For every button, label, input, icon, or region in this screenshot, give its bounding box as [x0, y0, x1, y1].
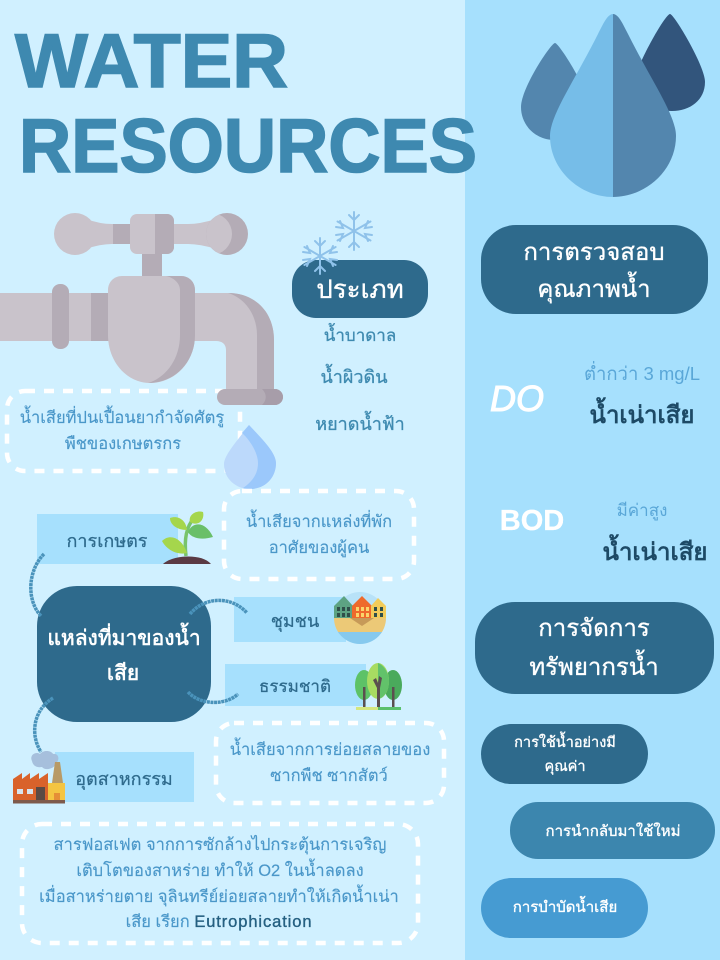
panel: water management heading: ทรัพยากรน้ำ: [529, 649, 659, 681]
water types list: น้ำผิวดิน: [320, 364, 388, 387]
icon: plant: [162, 512, 213, 564]
title: RESOURCES: [19, 104, 477, 189]
label: industry: อุตสาหกรรม: [75, 769, 173, 790]
panel: types pill: [292, 260, 428, 318]
icon: water drops: [521, 14, 705, 197]
panel: wastewater sources hub: แหล่งที่มาของน้ำ: [47, 623, 201, 650]
callout: household wastewater: อาศัยของผู้คน: [269, 539, 369, 558]
callout: decomposition wastewater: [216, 723, 444, 803]
pill: use water wisely: คุณค่า: [544, 759, 586, 775]
pill: reuse: การนำกลับมาใช้ใหม่: [546, 822, 680, 840]
BOD measure: มีค่าสูง: [617, 501, 667, 521]
panel: wastewater sources hub: เสีย: [107, 662, 139, 685]
label: industry: [55, 752, 194, 802]
connector curves: [31, 554, 247, 752]
callout: household wastewater: [224, 491, 414, 579]
title: WATER: [15, 19, 288, 104]
callout: pesticide wastewater: น้ำเสียที่ปนเปื้อนยากำจัดศัตรู: [20, 405, 224, 428]
callout: pesticide wastewater: [7, 391, 240, 471]
panel: wastewater sources hub: [37, 586, 211, 722]
pill: use water wisely: [481, 724, 648, 784]
callout: pesticide wastewater: พืชของเกษตรกร: [65, 435, 181, 453]
BOD measure: น้ำเน่าเสีย: [603, 533, 707, 566]
label: community: [234, 597, 346, 642]
icon: snowflakes: [303, 212, 372, 274]
callout: eutrophication: สารฟอสเฟต จากการซักล้างไปกระตุ้นการเจริญ: [54, 835, 386, 855]
panel: left background: [0, 0, 465, 960]
panel: water quality heading: การตรวจสอบ: [523, 239, 665, 266]
label: community: ชุมชน: [271, 611, 319, 632]
label: agriculture: [37, 514, 178, 564]
callout: eutrophication: เติบโตของสาหร่าย ทำให้ O2 ในน้ำลดลง: [76, 858, 364, 880]
DO measure: DO: [490, 378, 544, 419]
callout: household wastewater: น้ำเสียจากแหล่งที่พัก: [246, 509, 392, 531]
pill: reuse: [510, 802, 715, 859]
water types list: หยาดน้ำฟ้า: [315, 411, 405, 434]
panel: right background: [465, 0, 720, 960]
callout: eutrophication: เมื่อสาหร่ายตาย จุลินทรีย์ย่อยสลายทำให้เกิดน้ำเน่า: [39, 884, 399, 907]
DO measure: ต่ำกว่า 3 mg/L: [584, 361, 700, 384]
panel: water management heading: การจัดการ: [538, 615, 650, 642]
pill: use water wisely: การใช้น้ำอย่างมี: [514, 731, 616, 751]
label: agriculture: การเกษตร: [67, 531, 148, 551]
DO measure: น้ำเน่าเสีย: [590, 396, 694, 429]
panel: water management heading: [475, 602, 714, 694]
label: nature: [225, 664, 366, 706]
callout: decomposition wastewater: ซากพืช ซากสัตว์: [270, 766, 388, 785]
DO measure: [490, 361, 700, 429]
pill: treatment: [481, 878, 648, 938]
panel: water quality heading: คุณภาพน้ำ: [537, 271, 651, 304]
callout: eutrophication: [22, 824, 418, 943]
title: [15, 19, 477, 189]
panel: types pill: ประเภท: [316, 274, 404, 304]
icon: houses: [334, 592, 386, 645]
BOD measure: BOD: [500, 505, 564, 537]
callout: eutrophication: เสีย เรียก Eutrophication: [126, 913, 312, 931]
icon: factory: [13, 751, 65, 804]
icon: trees: [355, 663, 402, 710]
icon: small water drop: [224, 425, 276, 489]
BOD measure: [500, 501, 707, 566]
water types list: น้ำบาดาล: [324, 323, 396, 345]
pill: treatment: การบำบัดน้ำเสีย: [513, 896, 617, 916]
icon: faucet: [0, 213, 283, 405]
panel: water quality heading: [481, 225, 708, 314]
label: nature: ธรรมชาติ: [259, 677, 331, 696]
callout: decomposition wastewater: น้ำเสียจากการย่อยสลายของ: [230, 737, 430, 759]
water types list: [315, 323, 405, 434]
